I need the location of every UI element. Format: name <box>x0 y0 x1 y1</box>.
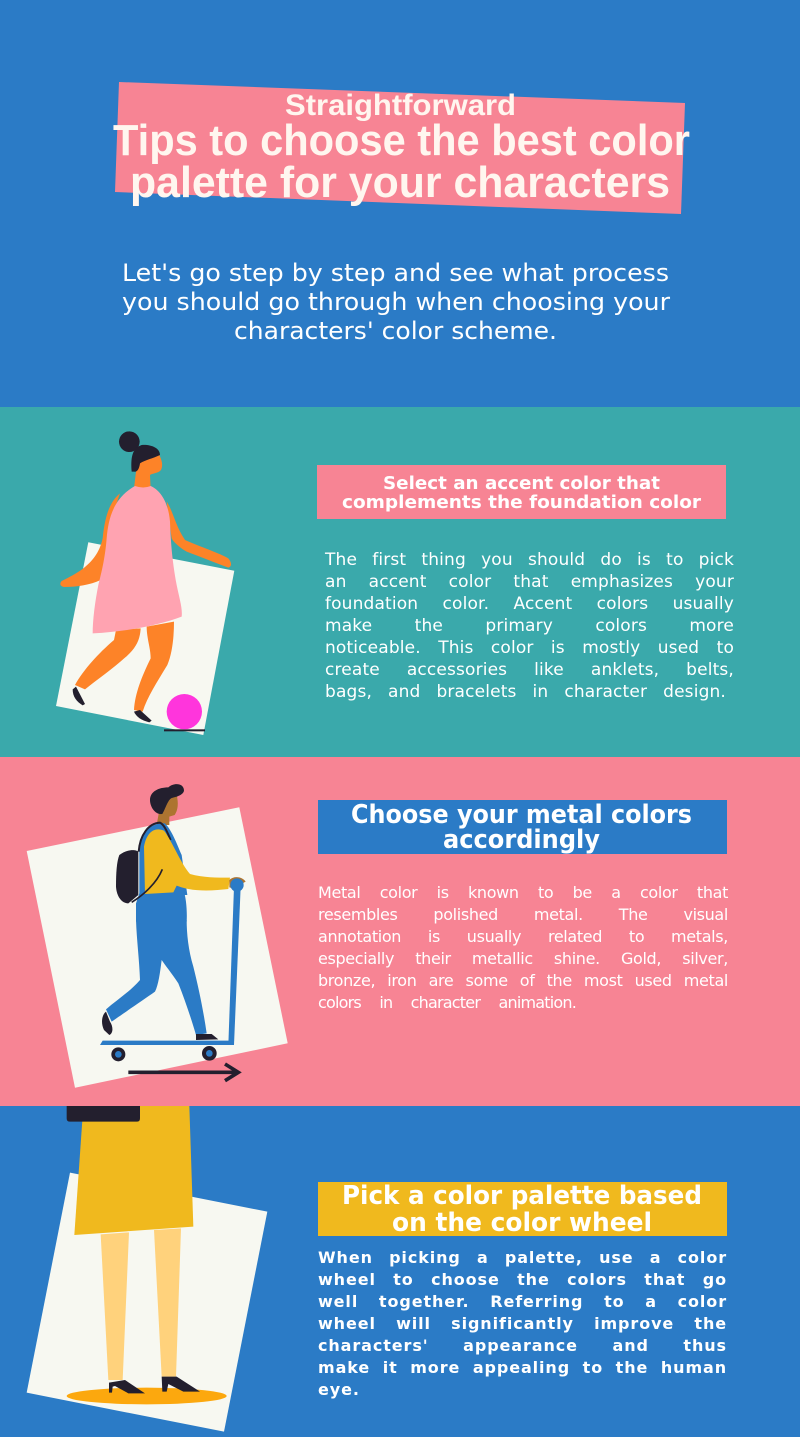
text: metal colors: colors in character animation. <box>318 993 576 1012</box>
text: accent color: an accent color that emphasizes your <box>325 572 734 592</box>
heading: accent color <box>317 465 726 519</box>
illustration: standing figure with yellow skirt <box>26 1106 268 1432</box>
text: accent color: make the primary colors more <box>325 616 734 636</box>
text: metal colors: bronze, iron are some of the most used metal <box>318 971 728 990</box>
panel: header <box>0 0 800 407</box>
text: accent color: create accessories like anklets, belts, <box>325 660 734 680</box>
illustration: woman with ball <box>56 431 234 735</box>
text: color wheel: characters' appearance and thus <box>318 1336 727 1355</box>
text: accent color: The first thing you should do is to pick <box>325 550 734 570</box>
title banner: characters' color scheme. <box>234 317 557 345</box>
text: color wheel: well together. Referring to a color <box>318 1292 727 1311</box>
text: color wheel: wheel will significantly improve the <box>318 1314 727 1333</box>
title banner: Let's go step by step and see what process <box>122 259 669 287</box>
panel: accent color <box>0 407 800 757</box>
title banner: you should go through when choosing your <box>122 288 670 316</box>
panel: metal colors <box>0 757 800 1106</box>
text: accent color: foundation color. Accent colors usually <box>325 594 734 614</box>
text: color wheel: wheel to choose the colors that go <box>318 1270 727 1289</box>
text: metal colors: Metal color is known to be a color that <box>318 883 728 902</box>
text: metal colors <box>318 883 728 1012</box>
text: metal colors: resembles polished metal. The visual <box>318 905 728 924</box>
title banner: palette for your characters <box>130 158 670 207</box>
text: color wheel: make it more appealing to the human <box>318 1358 727 1377</box>
text: color wheel: When picking a palette, use a color <box>318 1248 727 1267</box>
illustration: person on scooter <box>26 784 288 1088</box>
heading: color wheel <box>318 1182 727 1236</box>
heading: metal colors: Choose your metal colors <box>351 800 692 830</box>
text: color wheel <box>318 1248 727 1399</box>
heading: accent color: Select an accent color that <box>383 473 660 494</box>
title banner: Straightforward <box>285 89 516 122</box>
text: accent color: noticeable. This color is mostly used to <box>325 638 734 658</box>
title banner <box>113 82 690 345</box>
heading: metal colors <box>318 800 727 854</box>
heading: accent color: complements the foundation color <box>342 492 701 513</box>
text: accent color <box>324 550 734 702</box>
title banner: Tips to choose the best color <box>113 116 690 165</box>
panel: color wheel <box>0 1106 800 1437</box>
text: metal colors: especially their metallic shine. Gold, silver, <box>318 949 728 968</box>
text: accent color: bags, and bracelets in character design. <box>325 682 726 702</box>
text: color wheel: eye. <box>318 1380 360 1399</box>
text: metal colors: annotation is usually related to metals, <box>318 927 728 946</box>
